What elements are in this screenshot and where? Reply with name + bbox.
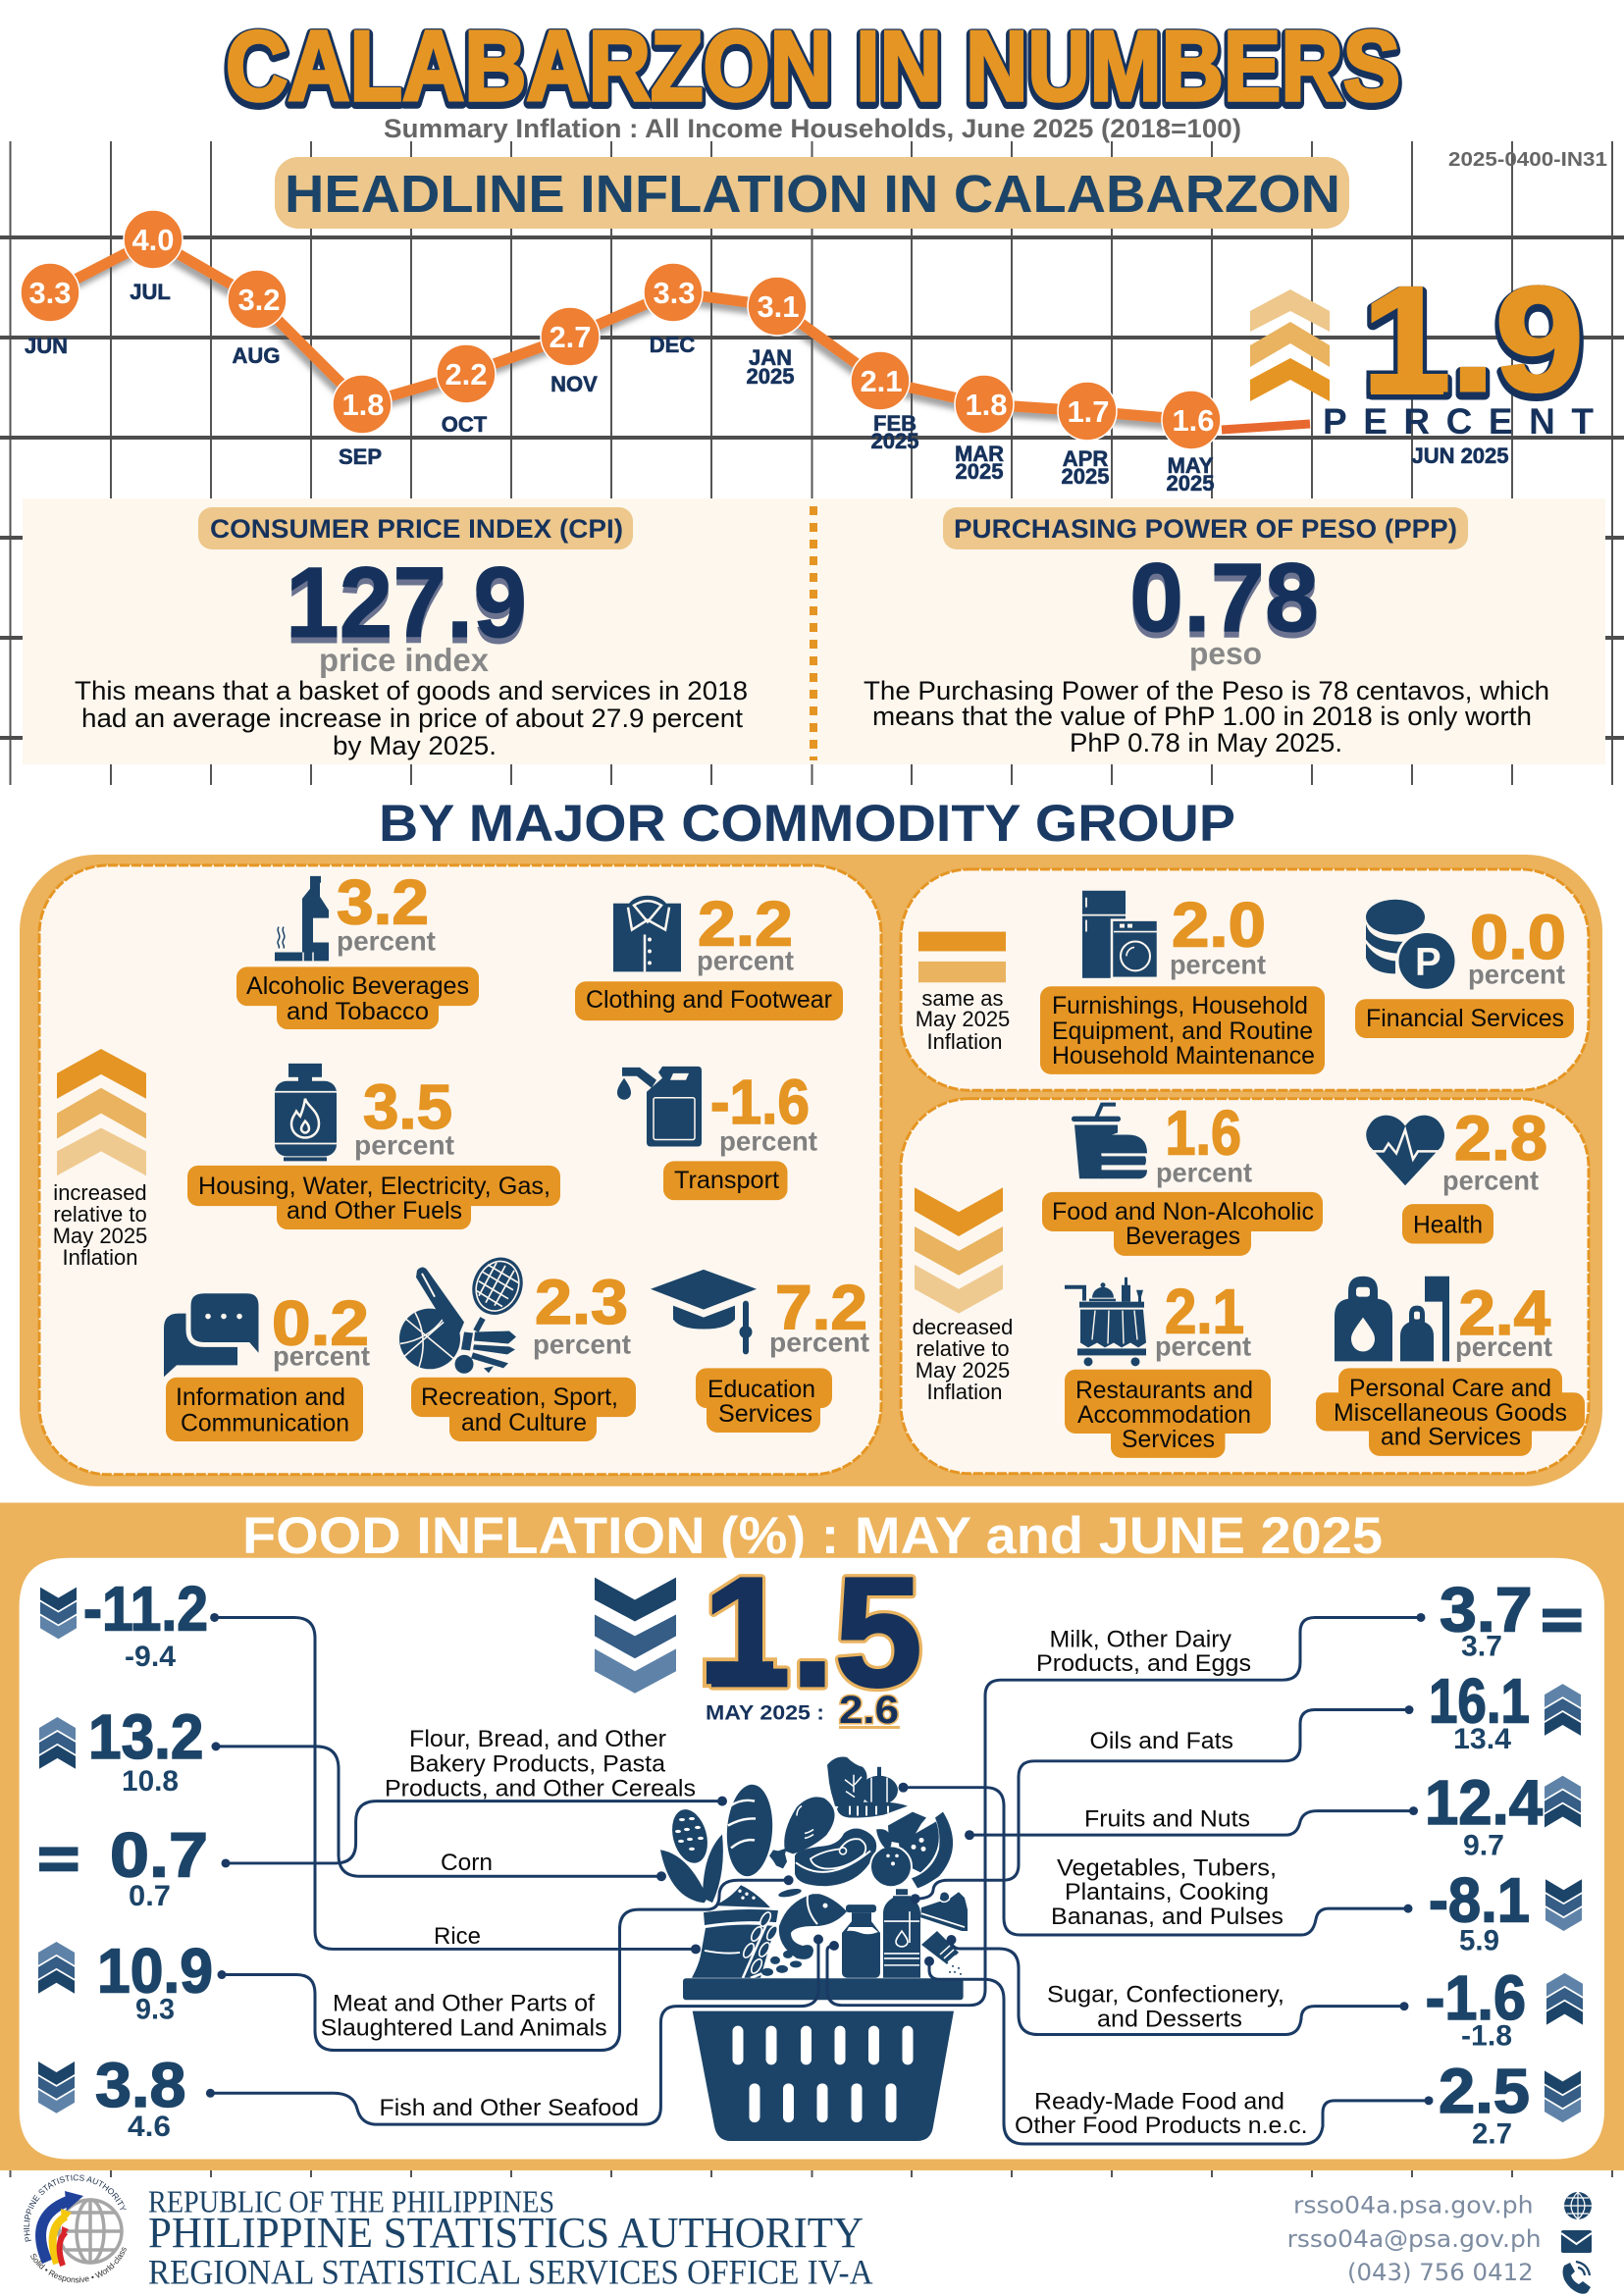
food label: fish: Fish and Other Seafood bbox=[379, 2095, 639, 2121]
item: information and communication bbox=[164, 1288, 370, 1441]
line chart: headline inflation trend: 1.7 bbox=[1067, 394, 1110, 429]
line chart: headline inflation trend: 1.8 bbox=[965, 388, 1008, 422]
icon: center down chevrons bbox=[595, 1578, 676, 1694]
item: financial services: percent bbox=[1468, 959, 1565, 989]
label pill: and Services bbox=[1381, 1423, 1521, 1450]
CPI description: by May 2025. bbox=[333, 731, 497, 760]
line chart: headline inflation trend: 4.0 bbox=[131, 223, 175, 257]
food label: milk: Products, and Eggs bbox=[1036, 1650, 1251, 1677]
line chart: headline inflation trend: APR bbox=[1063, 446, 1108, 471]
carrot bbox=[837, 1802, 908, 1818]
CPI value: 127.9 bbox=[286, 547, 527, 658]
label pill: Financial Services bbox=[1366, 1005, 1564, 1032]
label pill bbox=[1316, 1368, 1585, 1456]
CPI description: had an average increase in price of about 27.9 percent bbox=[81, 704, 744, 733]
same legend text: Inflation bbox=[926, 1029, 1003, 1054]
increased legend text: increased bbox=[53, 1180, 147, 1205]
pumpkin bbox=[861, 1767, 898, 1805]
icon: bottle and cigarettes bbox=[275, 876, 329, 961]
stat: 16.1: 16.1 bbox=[1429, 1666, 1530, 1737]
water bottle bbox=[883, 1889, 920, 1978]
line chart: headline inflation trend: 2025 bbox=[871, 429, 918, 453]
item: housing, water, electricity, gas: percent bbox=[354, 1129, 454, 1160]
May 2025 comparison bbox=[706, 1689, 900, 1732]
item: health: percent bbox=[1442, 1166, 1539, 1196]
icon: grocery basket bbox=[659, 1756, 968, 2141]
same legend text bbox=[916, 986, 1010, 1054]
item: alcoholic beverages and tobacco bbox=[236, 867, 479, 1029]
line chart: headline inflation trend: JUL bbox=[130, 280, 171, 304]
footer: agency names bbox=[148, 2184, 873, 2292]
connectors: left bbox=[206, 1613, 823, 2124]
icon: decreased chevrons bbox=[915, 1187, 1003, 1314]
panel: same as May groups bbox=[901, 869, 1589, 1090]
food inflation value 1.5: 1.5 bbox=[703, 1543, 922, 1719]
line chart: headline inflation trend: JAN bbox=[749, 345, 792, 370]
item: furnishings bbox=[1040, 890, 1325, 1074]
food label: flour, bread: Flour, Bread, and Other bbox=[409, 1726, 666, 1752]
item: furnishings: percent bbox=[1170, 949, 1266, 979]
stat: 12.4: 9.7 bbox=[1463, 1829, 1504, 1861]
stat: 10.9: 9.3 bbox=[135, 1994, 175, 2026]
icon: coins and peso: P bbox=[1415, 940, 1441, 983]
food label: rice: Rice bbox=[434, 1923, 481, 1950]
item: alcoholic beverages and tobacco: percent bbox=[337, 926, 436, 956]
item: education services bbox=[651, 1270, 869, 1433]
line chart: headline inflation trend: 2025 bbox=[1062, 464, 1109, 489]
icon: mail bbox=[1561, 2230, 1592, 2253]
line chart: headline inflation trend: 2.7 bbox=[549, 320, 592, 354]
item: personal care and miscellaneous: 2.4 bbox=[1458, 1278, 1551, 1348]
percent label: PERCENT bbox=[1323, 401, 1594, 442]
stat: 16.1: 13.4 bbox=[1453, 1723, 1511, 1755]
food label: ready-made: Other Food Products n.e.c. bbox=[1015, 2113, 1308, 2139]
stat: 12.4: 12.4 bbox=[1425, 1767, 1543, 1838]
PPP description: means that the value of PhP 1.00 in 2018 is only worth bbox=[872, 702, 1532, 731]
label pill bbox=[663, 1161, 787, 1200]
CPI unit: price index bbox=[319, 642, 490, 678]
label pill: Services bbox=[718, 1400, 812, 1428]
bread bbox=[724, 1783, 775, 1878]
decreased legend text: relative to bbox=[916, 1336, 1010, 1361]
label pill: Furnishings, Household bbox=[1052, 992, 1308, 1019]
footer: contact details bbox=[1287, 2192, 1542, 2286]
food label: flour, bread: Bakery Products, Pasta bbox=[409, 1750, 666, 1777]
stat: 2.5: 2.5 bbox=[1439, 2056, 1530, 2126]
same legend text: May 2025 bbox=[916, 1007, 1010, 1031]
same legend text: same as bbox=[921, 986, 1004, 1011]
footer logo: PHILIPPINE STATISTICS AUTHORITY bbox=[24, 2174, 127, 2242]
item: alcoholic beverages and tobacco: 3.2 bbox=[337, 867, 429, 938]
stat: 3.7: 3.7 bbox=[1461, 1630, 1502, 1662]
icon: gas tank bbox=[275, 1064, 337, 1161]
line chart: headline inflation trend: 1.6 bbox=[1172, 403, 1215, 438]
label pill: and Tobacco bbox=[287, 998, 429, 1025]
basket body bbox=[693, 2011, 954, 2141]
label pill: Recreation, Sport, bbox=[421, 1383, 618, 1411]
PPP heading bbox=[943, 507, 1468, 549]
label pill: and Culture bbox=[461, 1409, 587, 1436]
item: clothing and footwear bbox=[575, 889, 843, 1020]
food label: meat bbox=[321, 1991, 607, 2042]
food label: ready-made bbox=[1015, 2089, 1308, 2139]
PPP description: PhP 0.78 in May 2025. bbox=[1070, 728, 1342, 757]
CPI description bbox=[75, 676, 748, 760]
icon: chat bubbles bbox=[164, 1291, 261, 1377]
line chart: headline inflation trend: AUG bbox=[233, 343, 280, 368]
label pill: Accommodation bbox=[1077, 1401, 1251, 1429]
line chart: headline inflation trend bbox=[21, 210, 1509, 496]
headline heading: HEADLINE INFLATION IN CALABARZON bbox=[285, 165, 1340, 224]
title: CALABARZON IN NUMBERS bbox=[226, 15, 1400, 125]
label pill: Miscellaneous Goods bbox=[1334, 1399, 1567, 1427]
footer: agency names: REGIONAL STATISTICAL SERVICES OFFICE IV-A bbox=[148, 2253, 873, 2292]
headline value 1.9: 1.9 bbox=[1362, 256, 1584, 423]
basket rim bbox=[683, 1978, 964, 2000]
item: restaurants and accommodation bbox=[1065, 1277, 1271, 1458]
line chart: headline inflation trend: MAR bbox=[955, 442, 1004, 466]
label pill: and Other Fuels bbox=[287, 1197, 462, 1225]
connectors: right bbox=[827, 1613, 1433, 2144]
CPI heading: CONSUMER PRICE INDEX (CPI) bbox=[210, 514, 623, 544]
label pill bbox=[696, 1368, 832, 1433]
item: furnishings: 2.0 bbox=[1172, 890, 1266, 960]
stat: flour -11.2: -11.2 bbox=[83, 1574, 208, 1644]
stat: 3.8: 4.6 bbox=[128, 2111, 171, 2143]
item: recreation, sport, and culture: percent bbox=[533, 1329, 631, 1359]
milk bottle bbox=[842, 1905, 880, 1978]
stat: -1.6: -1.8 bbox=[1461, 2020, 1512, 2052]
food label: sugar bbox=[1047, 1982, 1284, 2033]
stat: 13.2 bbox=[39, 1701, 204, 1798]
label pill bbox=[166, 1378, 363, 1441]
CPI heading bbox=[198, 507, 633, 549]
line chart: headline inflation trend: OCT bbox=[442, 412, 488, 437]
stat: -8.1: -8.1 bbox=[1429, 1865, 1530, 1936]
cake bbox=[920, 1892, 968, 1933]
footer: agency names: REPUBLIC OF THE PHILIPPINES bbox=[148, 2184, 554, 2219]
salt shaker bbox=[921, 1931, 962, 1975]
label pill: Household Maintenance bbox=[1052, 1042, 1315, 1070]
grain sack and wheat bbox=[692, 1885, 802, 1978]
stat: 0.7 bbox=[39, 1819, 208, 1912]
reference code: 2025-0400-IN31 bbox=[1448, 149, 1607, 171]
PPP description: The Purchasing Power of the Peso is 78 centavos, which bbox=[864, 676, 1549, 705]
icon: coins and peso bbox=[1366, 900, 1456, 990]
line chart: headline inflation trend: 3.3 bbox=[28, 276, 72, 310]
item: recreation, sport, and culture: 2.3 bbox=[535, 1267, 628, 1337]
food label: milk: Milk, Other Dairy bbox=[1049, 1626, 1231, 1652]
line chart: headline inflation trend: FEB bbox=[873, 411, 917, 436]
PPP value: 0.78 bbox=[1129, 543, 1319, 652]
line chart: headline inflation trend: 2.2 bbox=[445, 357, 488, 391]
PPP unit: peso bbox=[1189, 636, 1262, 671]
label pill: Alcoholic Beverages bbox=[246, 972, 469, 1000]
line chart: headline inflation trend: DEC bbox=[650, 333, 695, 357]
decreased legend text: decreased bbox=[913, 1315, 1013, 1339]
line chart: headline inflation trend: 2025 bbox=[1167, 471, 1214, 496]
PPP description bbox=[864, 676, 1549, 757]
food label: vegetables bbox=[1051, 1854, 1283, 1930]
label pill bbox=[575, 981, 843, 1020]
label pill bbox=[187, 1166, 560, 1229]
food label: sugar: Sugar, Confectionery, bbox=[1047, 1982, 1284, 2009]
increased legend text: Inflation bbox=[62, 1245, 138, 1270]
stat: 3.7 bbox=[1440, 1575, 1582, 1662]
food label: meat: Slaughtered Land Animals bbox=[321, 2015, 607, 2042]
stat: 2.5 bbox=[1439, 2056, 1581, 2151]
stat: -8.1 bbox=[1429, 1865, 1582, 1957]
label pill: Equipment, and Routine bbox=[1052, 1018, 1313, 1045]
item: health bbox=[1366, 1103, 1547, 1243]
CPI value: 127.9 bbox=[286, 552, 527, 664]
line chart: headline inflation trend: JUN 2025 bbox=[1411, 444, 1509, 468]
footer: contact details: (043) 756 0412 bbox=[1347, 2259, 1534, 2286]
item: financial services bbox=[1355, 900, 1574, 1038]
line chart: headline inflation trend: 3.3 bbox=[653, 276, 696, 310]
item: recreation, sport, and culture bbox=[399, 1250, 636, 1441]
label pill: Personal Care and bbox=[1349, 1375, 1551, 1402]
item: housing, water, electricity, gas: 3.5 bbox=[363, 1071, 452, 1142]
panel: CPI and PPP bbox=[23, 498, 1605, 764]
footer logo: Solid • Responsive • World-class bbox=[30, 2247, 127, 2282]
fish bbox=[778, 1887, 847, 1959]
food label: vegetables: Plantains, Cooking bbox=[1065, 1879, 1269, 1905]
icon: graduation cap bbox=[651, 1270, 757, 1354]
line chart: headline inflation trend: 3.1 bbox=[757, 289, 800, 324]
food label: oils: Oils and Fats bbox=[1089, 1728, 1233, 1754]
item: financial services: 0.0 bbox=[1470, 902, 1566, 972]
footer: agency names: PHILIPPINE STATISTICS AUTHORITY bbox=[148, 2209, 864, 2257]
item: clothing and footwear: percent bbox=[697, 945, 794, 975]
label pill bbox=[1042, 1192, 1323, 1256]
May 2025 comparison: MAY 2025 : bbox=[706, 1702, 824, 1724]
icon: equal bars bbox=[918, 932, 1006, 982]
food label: vegetables: Bananas, and Pulses bbox=[1051, 1904, 1283, 1930]
label pill: Clothing and Footwear bbox=[586, 986, 832, 1014]
icon: increased chevrons bbox=[57, 1049, 146, 1175]
line chart: headline inflation trend: MAY bbox=[1168, 453, 1214, 478]
stat: 3.7: 3.7 bbox=[1440, 1575, 1533, 1644]
steak bbox=[795, 1828, 876, 1886]
section heading: by major commodity group: BY MAJOR COMMODITY GROUP bbox=[379, 795, 1235, 853]
item: clothing and footwear: 2.2 bbox=[698, 889, 793, 959]
item: information and communication: percent bbox=[273, 1340, 370, 1371]
icon: toiletries bbox=[1335, 1277, 1449, 1361]
stat: 0.7: 0.7 bbox=[129, 1880, 171, 1912]
panel: food inflation bbox=[0, 1503, 1624, 2170]
item: information and communication: 0.2 bbox=[272, 1288, 369, 1358]
food label: flour, bread: Products, and Other Cereals bbox=[385, 1776, 696, 1802]
item: transport: -1.6 bbox=[710, 1067, 810, 1137]
icon: serving cart bbox=[1065, 1278, 1146, 1366]
label pill bbox=[1040, 986, 1325, 1074]
panel: increased groups bbox=[39, 865, 881, 1475]
item: food and non-alcoholic beverages: 1.6 bbox=[1166, 1098, 1241, 1168]
food label: vegetables: Vegetables, Tubers, bbox=[1057, 1854, 1277, 1881]
stat: 2.5: 2.7 bbox=[1472, 2118, 1512, 2151]
food label: meat: Meat and Other Parts of bbox=[333, 1991, 595, 2017]
icon: sports equipment bbox=[399, 1250, 531, 1374]
stat: 12.4 bbox=[1425, 1767, 1581, 1861]
item: personal care and miscellaneous bbox=[1316, 1277, 1585, 1456]
stat: -8.1: 5.9 bbox=[1459, 1924, 1499, 1957]
food inflation value 1.5: 1.5 bbox=[703, 1543, 922, 1719]
footer logo bbox=[24, 2174, 127, 2282]
food label: corn: Corn bbox=[441, 1850, 493, 1876]
decreased legend text: Inflation bbox=[926, 1380, 1003, 1404]
line chart: headline inflation trend: JUN bbox=[25, 334, 68, 358]
item: transport: percent bbox=[719, 1125, 817, 1156]
item: education services: 7.2 bbox=[775, 1273, 867, 1342]
label pill: Communication bbox=[181, 1410, 349, 1436]
item: education services: percent bbox=[769, 1327, 869, 1357]
stat: 3.8 bbox=[38, 2050, 185, 2143]
stat: 3.8: 3.8 bbox=[95, 2050, 185, 2120]
icon: up chevrons headline bbox=[1250, 289, 1330, 401]
panel backing bbox=[20, 855, 1602, 1487]
line chart: headline inflation trend: 2025 bbox=[956, 459, 1003, 484]
increased legend text: relative to bbox=[53, 1202, 147, 1226]
stat: flour -11.2 bbox=[40, 1574, 208, 1673]
line chart: headline inflation trend: 1.8 bbox=[341, 388, 385, 422]
label pill bbox=[1355, 999, 1574, 1038]
label pill bbox=[236, 966, 479, 1029]
label pill: Information and bbox=[176, 1383, 345, 1411]
food label: fruits: Fruits and Nuts bbox=[1084, 1806, 1250, 1832]
decreased legend text: May 2025 bbox=[916, 1358, 1010, 1383]
corn bbox=[659, 1805, 723, 1904]
icon: heart with pulse bbox=[1366, 1116, 1444, 1185]
panel: decreased groups bbox=[901, 1098, 1589, 1474]
line chart: headline inflation trend: SEP bbox=[339, 444, 382, 469]
stat: 10.9 bbox=[38, 1935, 213, 2026]
food label: flour, bread bbox=[385, 1726, 696, 1802]
label pill bbox=[1402, 1204, 1493, 1243]
line chart: headline inflation trend: NOV bbox=[550, 372, 598, 396]
item: restaurants and accommodation: 2.1 bbox=[1165, 1277, 1244, 1346]
footer: contact details: rsso04a@psa.gov.ph bbox=[1287, 2225, 1542, 2253]
label pill: Housing, Water, Electricity, Gas, bbox=[198, 1173, 550, 1200]
item: restaurants and accommodation: percent bbox=[1155, 1331, 1251, 1361]
panel: commodity groups bbox=[20, 855, 1602, 1487]
label pill: Services bbox=[1122, 1426, 1215, 1453]
stat: 10.9: 10.9 bbox=[97, 1935, 213, 2006]
item: food and non-alcoholic beverages: percent bbox=[1156, 1157, 1252, 1187]
CPI description: This means that a basket of goods and services in 2018 bbox=[75, 676, 748, 705]
label pill: Transport bbox=[674, 1167, 779, 1194]
subtitle: Summary Inflation : All Income Households, June 2025 (2018=100) bbox=[384, 114, 1241, 143]
line chart: headline inflation trend: 2.1 bbox=[860, 364, 903, 398]
item: housing, water, electricity, gas bbox=[187, 1064, 560, 1229]
icon: phone bbox=[1562, 2262, 1591, 2294]
icon: jerrycan bbox=[617, 1067, 702, 1146]
food label: milk bbox=[1036, 1626, 1251, 1677]
label pill: Food and Non-Alcoholic bbox=[1052, 1198, 1314, 1226]
food inflation heading: FOOD INFLATION (%) : MAY and JUNE 2025 bbox=[242, 1507, 1383, 1565]
watermelon and orange bbox=[870, 1812, 953, 1888]
stat: 16.1 bbox=[1429, 1666, 1581, 1755]
line chart: headline inflation trend: 2025 bbox=[747, 364, 794, 389]
label pill: Education bbox=[707, 1376, 815, 1403]
increased legend text: May 2025 bbox=[53, 1224, 147, 1248]
item: health: 2.8 bbox=[1454, 1103, 1547, 1174]
PPP value: 0.78 bbox=[1129, 548, 1319, 657]
footer: contact details: rsso04a.psa.gov.ph bbox=[1293, 2192, 1534, 2219]
May 2025 comparison: 2.6 bbox=[839, 1689, 899, 1732]
label pill bbox=[1065, 1370, 1271, 1458]
icon: drink and burger bbox=[1072, 1105, 1147, 1178]
stat: 13.2: 13.2 bbox=[88, 1701, 203, 1772]
label pill bbox=[411, 1378, 636, 1441]
stat: 13.2: 10.8 bbox=[122, 1765, 179, 1798]
line chart: headline inflation trend: 3.2 bbox=[237, 283, 281, 317]
stat: -1.6 bbox=[1426, 1962, 1583, 2052]
food label: ready-made: Ready-Made Food and bbox=[1034, 2089, 1284, 2115]
stat: -1.6: -1.6 bbox=[1426, 1962, 1526, 2033]
label pill: Health bbox=[1413, 1212, 1483, 1238]
item: transport bbox=[617, 1067, 817, 1200]
headline value 1.9: 1.9 bbox=[1362, 260, 1584, 427]
PPP heading: PURCHASING POWER OF PESO (PPP) bbox=[954, 514, 1457, 544]
icon: globe bbox=[1564, 2192, 1592, 2219]
increased legend text bbox=[53, 1180, 147, 1270]
label pill: Beverages bbox=[1126, 1223, 1240, 1250]
drumstick bbox=[769, 1797, 835, 1868]
title: CALABARZON IN NUMBERS bbox=[226, 12, 1400, 122]
lettuce bbox=[827, 1756, 867, 1811]
food label: sugar: and Desserts bbox=[1097, 2007, 1242, 2033]
item: food and non-alcoholic beverages bbox=[1042, 1098, 1323, 1256]
label pill: Restaurants and bbox=[1075, 1377, 1253, 1404]
icon: shirt bbox=[613, 896, 681, 971]
decreased legend text bbox=[913, 1315, 1013, 1404]
stat: 0.7: 0.7 bbox=[110, 1819, 208, 1890]
icon: fridge and washer bbox=[1082, 891, 1158, 978]
item: personal care and miscellaneous: percent bbox=[1455, 1331, 1552, 1362]
stat: flour -11.2: -9.4 bbox=[125, 1641, 176, 1673]
